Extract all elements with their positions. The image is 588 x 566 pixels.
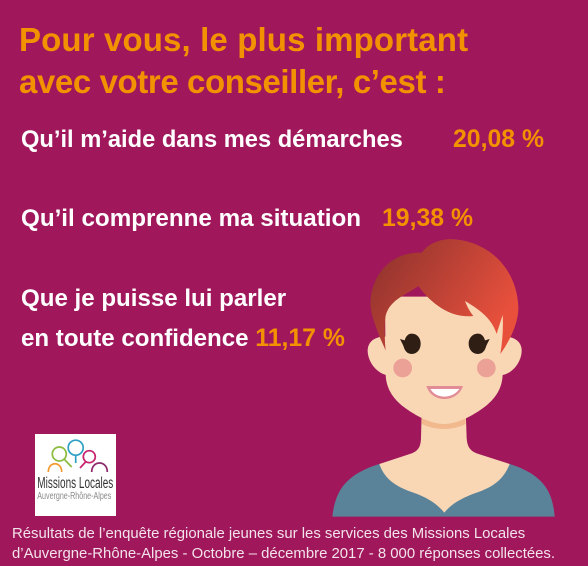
title: Pour vous, le plus important: [19, 21, 468, 58]
illustration: woman portrait: [332, 239, 555, 517]
icon: neck and chest: [379, 410, 510, 513]
answer 1 label: Qu’il m’aide dans mes démarches: [21, 127, 403, 153]
title: [19, 21, 468, 100]
icon: neck shadow: [422, 415, 466, 429]
icon: teeth: [430, 389, 459, 397]
footer source note: [12, 526, 555, 562]
footer source note: d’Auvergne-Rhône-Alpes - Octobre – décembre 2017 - 8 000 réponses collectées.: [12, 546, 555, 562]
icon: shirt: [332, 464, 555, 517]
answer 2 percentage: 19,38 %: [382, 205, 473, 232]
answer 2 label: Qu’il comprenne ma situation: [21, 205, 361, 232]
icon: face: [385, 297, 503, 424]
icon: hair: [370, 239, 518, 354]
icon: left cheek: [393, 359, 412, 377]
icon: right cheek: [477, 359, 496, 377]
icon: mouth: [426, 386, 463, 399]
footer source note: Résultats de l’enquête régionale jeunes sur les services des Missions Locales: [12, 526, 525, 542]
title: avec votre conseiller, c’est :: [19, 63, 445, 100]
logo: Missions Locales: [35, 434, 116, 516]
icon: left ear: [368, 337, 388, 375]
answer 3 text: [21, 285, 345, 352]
answer 3 text: Que je puisse lui parler: [21, 285, 286, 312]
answer 3 text: en toute confidence 11,17 %: [21, 325, 345, 352]
icon: right ear: [501, 337, 522, 375]
icon: left eye: [400, 334, 421, 354]
logo mark: [48, 440, 107, 472]
icon: right eye: [469, 334, 490, 354]
answer 1 percentage: 20,08 %: [453, 126, 544, 153]
